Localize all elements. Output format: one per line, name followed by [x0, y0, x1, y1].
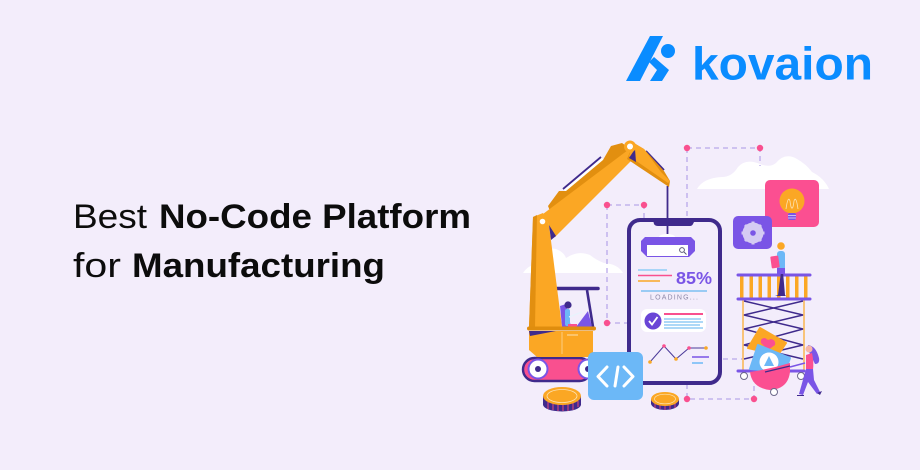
wheel: right: [578, 360, 598, 378]
illustration: no-code manufacturing scene: [523, 140, 829, 412]
lift railing: [740, 276, 808, 299]
title: Manufacturing: [132, 247, 385, 285]
progress text lines: [638, 270, 707, 291]
title: [73, 198, 471, 285]
coin: small: [651, 392, 679, 410]
wheelbarrow with media cards: [748, 328, 822, 396]
lift platforms: [738, 275, 810, 371]
cab body: [529, 331, 593, 357]
dashed connectors: [607, 148, 760, 399]
cab frame: [557, 288, 598, 327]
boom joints: [629, 149, 636, 162]
lift wheels: [740, 372, 804, 380]
worker on lift: [770, 242, 786, 296]
lift posts: [743, 299, 804, 371]
phone: [629, 220, 720, 383]
logo: kovaion: [626, 36, 873, 90]
woman pushing: [797, 345, 822, 396]
excavator: [523, 140, 670, 381]
boom: [548, 143, 632, 216]
connector nodes: [604, 145, 763, 402]
title: No-Code Platform: [159, 198, 471, 236]
tread: [523, 358, 591, 381]
coin: large: [543, 387, 581, 412]
scissor arms: [744, 301, 803, 359]
icon: light bulb card: [765, 180, 819, 227]
scissor lift: [738, 275, 810, 380]
title: Best: [73, 198, 147, 236]
icon: kovaion mark: [626, 36, 675, 81]
cloud: right: [697, 156, 829, 189]
logo wordmark: kovaion: [692, 38, 873, 90]
crane post: [529, 213, 562, 327]
forearm: [627, 143, 670, 187]
phone notch: [653, 220, 695, 226]
search bar: [641, 234, 695, 257]
title: for: [73, 247, 121, 285]
cloud: left: [523, 249, 623, 273]
barrow bowl: [750, 363, 790, 390]
barrow wheel: [770, 388, 778, 396]
icon: gear card: [733, 216, 772, 249]
line chart: [648, 344, 709, 364]
barrow handle: [790, 363, 805, 367]
phone body: [629, 220, 720, 383]
progress value: 85%: [676, 268, 712, 288]
operator: [560, 301, 582, 328]
icon: code block: [588, 352, 643, 400]
cab deck: [529, 326, 594, 330]
crane cable: [666, 186, 668, 234]
card: play: [750, 345, 790, 372]
check card: [641, 309, 706, 332]
wheel: left: [528, 360, 548, 378]
loading label: LOADING...: [650, 294, 698, 302]
hydraulic rods: [563, 157, 604, 192]
card: heart: [748, 328, 786, 355]
